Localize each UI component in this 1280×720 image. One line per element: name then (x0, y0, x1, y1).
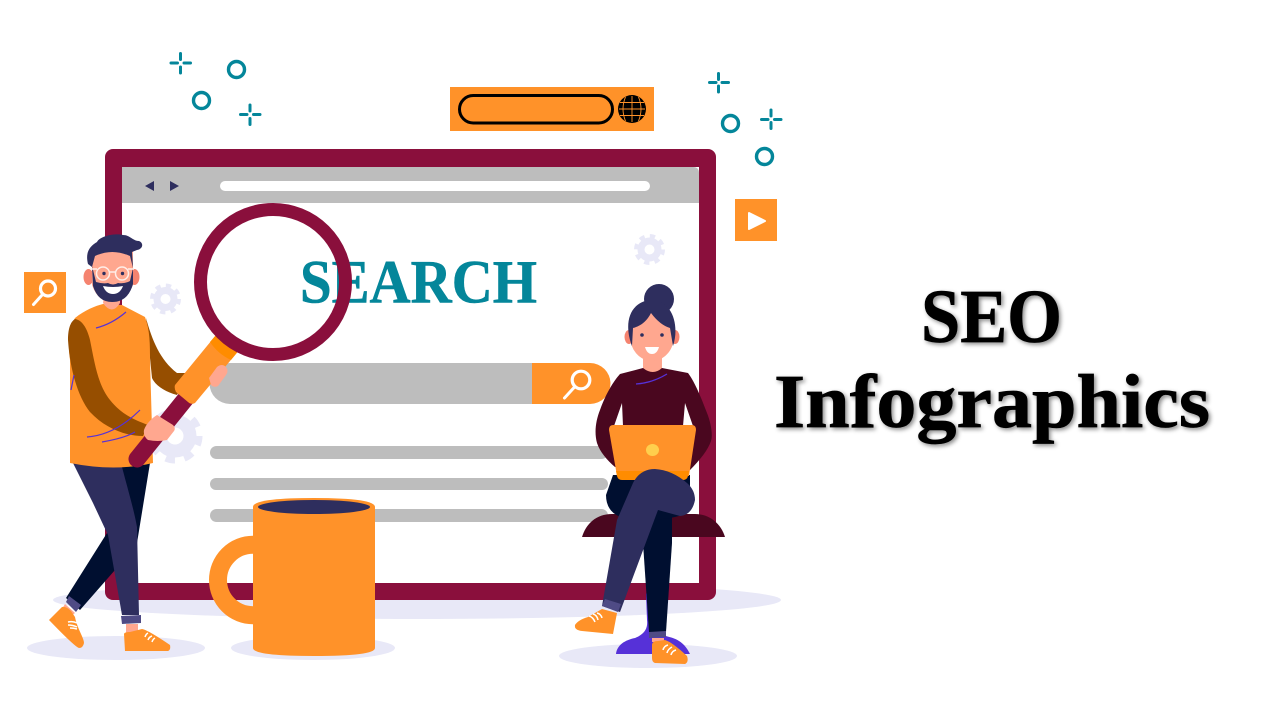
woman neck (643, 355, 662, 372)
woman back leg (643, 510, 672, 632)
woman face (630, 311, 674, 361)
woman purple stool base (616, 593, 690, 654)
laptop (609, 425, 696, 476)
icon: gear left small (152, 286, 178, 312)
icon: play button (735, 199, 777, 241)
browser toolbar (122, 167, 699, 203)
coffee mug (218, 498, 375, 656)
man back cuff and ankle (66, 596, 81, 612)
man front leg (73, 463, 139, 615)
icon: gear large (152, 412, 198, 460)
sparkles: top right (710, 74, 781, 164)
icon: gear top right (636, 236, 662, 262)
woman hair (628, 300, 675, 346)
man character (49, 234, 190, 651)
title: SEO Infographics (774, 275, 1210, 444)
man front shoe (124, 629, 170, 651)
man beard (92, 266, 133, 302)
man back shoe (49, 607, 84, 648)
man back leg (66, 463, 150, 610)
sparkles: top left (171, 54, 260, 124)
woman character (575, 284, 725, 664)
woman smile (645, 347, 659, 354)
address bar badge with globe icon (450, 87, 654, 131)
address field (220, 181, 650, 191)
browser window (105, 149, 716, 600)
floor shadows (27, 581, 781, 668)
magnifier ring (200, 210, 346, 354)
icon: search badge (24, 272, 66, 313)
woman crossed leg (602, 469, 695, 612)
title: SEO Infographics: SEO (921, 275, 1062, 359)
magnifier handle (137, 397, 187, 459)
search field (210, 363, 610, 404)
woman lower body (606, 475, 690, 520)
man hair (87, 234, 142, 268)
man face (92, 250, 133, 302)
woman right shoe (652, 640, 688, 664)
woman bun (644, 284, 674, 314)
man neck (103, 296, 120, 310)
title: SEO Infographics: Infographics (774, 360, 1210, 444)
woman body (596, 368, 712, 470)
man glasses (90, 267, 134, 280)
man ears (84, 269, 94, 285)
stool (582, 514, 725, 537)
man right arm (146, 318, 190, 395)
woman ears (624, 330, 634, 344)
magnifying glass (137, 210, 346, 459)
man hands (144, 365, 228, 441)
result lines (210, 446, 608, 522)
heading: SEARCH: SEARCH (300, 250, 537, 316)
magnifier grip (175, 335, 240, 404)
man sleeve (68, 319, 148, 436)
navigation arrows (145, 181, 179, 191)
woman arm gaps (614, 403, 693, 426)
man smile (103, 286, 123, 294)
woman left shoe (575, 609, 617, 634)
man shirt (69, 304, 153, 468)
